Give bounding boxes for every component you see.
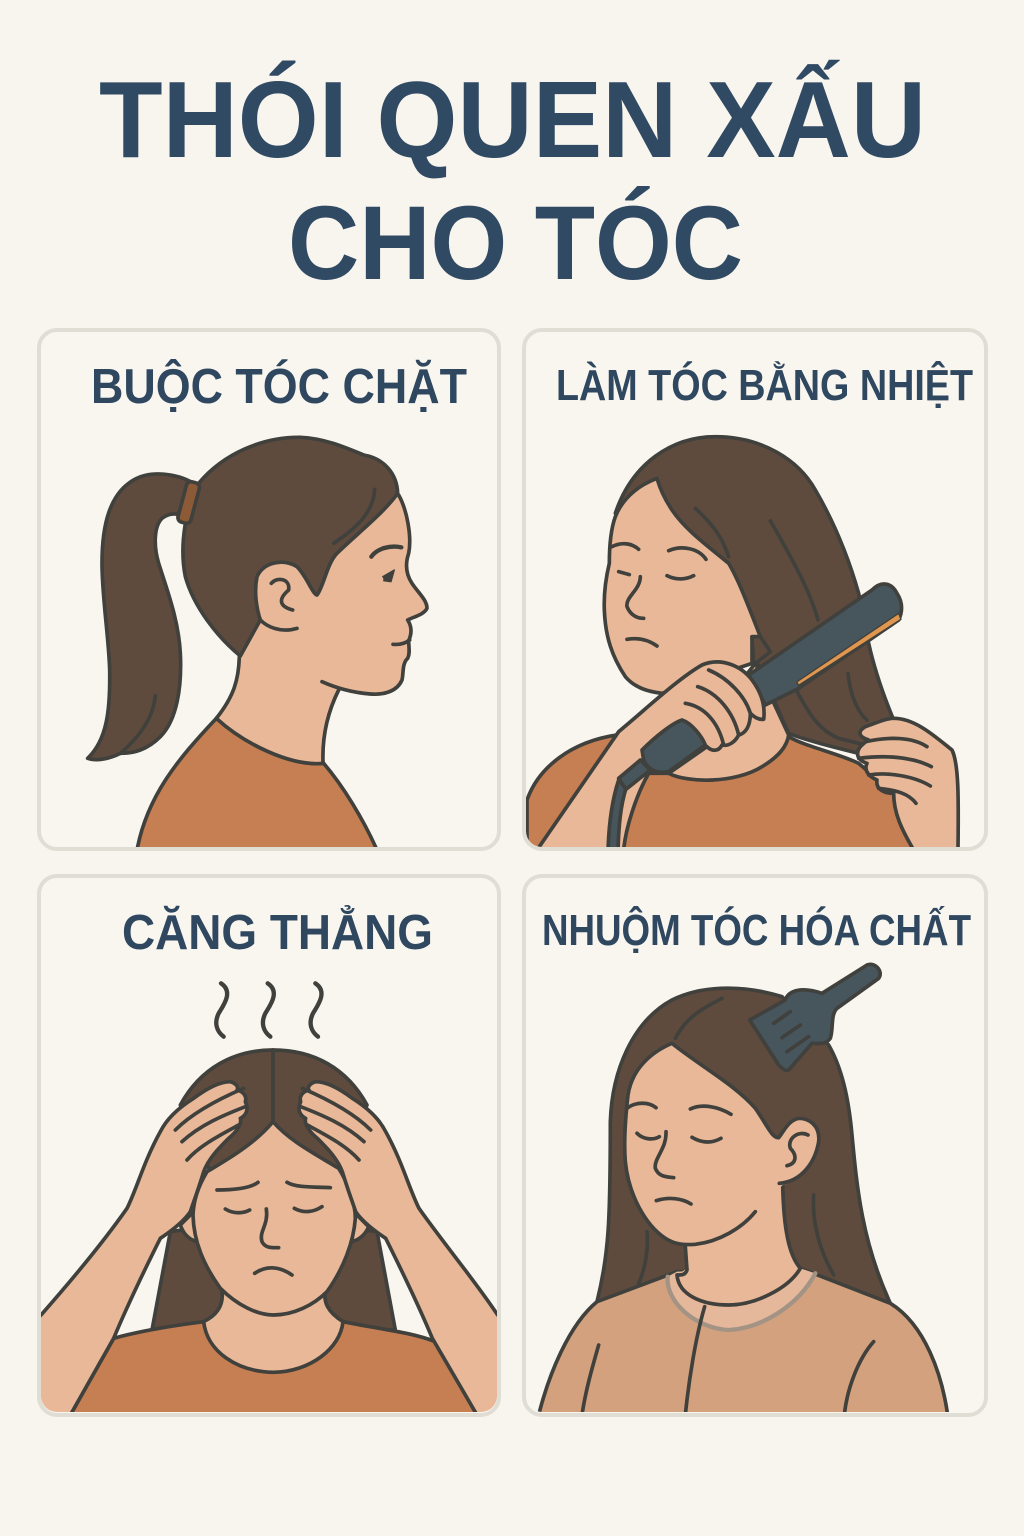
straightener [749, 584, 902, 705]
neck [682, 1186, 798, 1272]
ponytail [88, 474, 194, 760]
cape seams [685, 1307, 705, 1415]
back hair [150, 1228, 220, 1328]
cord [608, 780, 626, 852]
right arm and hand [299, 1082, 512, 1415]
steam lines [216, 983, 321, 1037]
panel: heat styling [524, 330, 986, 852]
face [604, 478, 760, 693]
long hair [597, 988, 890, 1322]
illustration: woman with ponytail [88, 437, 427, 850]
title [99, 59, 926, 302]
illustration: stressed woman holding head [34, 983, 512, 1415]
illustration: woman dyeing hair [539, 964, 948, 1415]
panel: stress [34, 876, 512, 1415]
long hair [615, 437, 894, 753]
top hair [180, 1050, 367, 1172]
panel: chemical dye [524, 876, 986, 1415]
panel: tight hair tie [39, 330, 499, 850]
straightener grip [619, 760, 650, 789]
arm and hand [537, 662, 764, 850]
face [625, 1043, 819, 1245]
collar [668, 1268, 815, 1330]
dye brush [750, 964, 880, 1070]
illustration: woman with hair straightener [527, 437, 958, 852]
heading: stress: CĂNG THẲNG [122, 905, 433, 960]
hair top [183, 437, 398, 656]
face features [371, 547, 401, 557]
ear [260, 620, 297, 630]
heading: tight hair tie: BUỘC TÓC CHẶT [91, 359, 467, 414]
right hand [858, 718, 958, 850]
neck [204, 1292, 343, 1372]
shirt [70, 1322, 477, 1415]
title: CHO TÓC [288, 185, 743, 302]
cape [539, 1268, 948, 1415]
left arm and hand [34, 1082, 247, 1415]
hair band [177, 481, 201, 524]
ears [180, 1212, 197, 1242]
face [193, 1122, 355, 1315]
title: THÓI QUEN XẤU [99, 59, 926, 181]
